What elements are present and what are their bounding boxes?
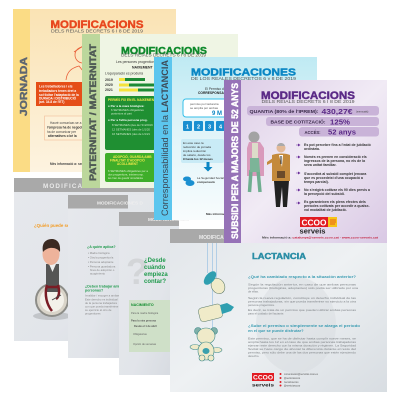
- pill: amount: (mensuals): [356, 110, 369, 114]
- panel: green leaflet on paternity and maternity: L'equiparació es produirà: [105, 72, 143, 76]
- leaflet D paragraph one: progenitoras (biológicas, adoptantes) sólo podía ser utilizado por una: [248, 286, 358, 290]
- orange leaflet side label: JORNADA: [18, 57, 30, 116]
- light green box: ADOPCIÓ, GUARDA AMB: [113, 154, 152, 159]
- green leaflet intro: Les persones progenitores: [116, 60, 158, 64]
- bullet list: temps parcial).: [304, 180, 329, 184]
- red callout: Les treballadores i els: [39, 84, 73, 88]
- dark green box: 8 SETMANES (des de l'1/4/2019: [112, 123, 153, 127]
- month number tiles: 3: [208, 124, 211, 130]
- dark green box: [105, 96, 156, 150]
- light green box: 6 SETMANES obligatòries per a: [108, 169, 148, 173]
- blue leaflet info box: implica reducción: [183, 149, 207, 153]
- stacked bars by year: 2021: [105, 88, 113, 92]
- leaflet D paragraph one: Es decir, se trata de un permiso que pueden utilizar ambas personas: [248, 308, 357, 312]
- green leaflet subtitle: DELS REIALS DECRETS 6 I 8 DE 2019: [121, 52, 207, 58]
- leaflet B heading one: ¿A quién aplica?: [87, 245, 116, 249]
- panel: grey leaflet B who does it apply to: personas?: [85, 288, 103, 292]
- leaflet B paragraph: progenitores: [85, 312, 101, 316]
- leaflet D paragraph one: personas trabajadoras, sin que pueda transferirse su ejercicio a la otra: [248, 300, 356, 304]
- leaflet B heading two: ¿Deben trabajar ambas: [85, 284, 125, 288]
- bordered note: l'empresa ha de negociar: [47, 126, 86, 130]
- leaflet B paragraph: su ejercicio al otro de: [85, 308, 112, 312]
- blue leaflet info box: reducción de jornada: [183, 145, 211, 149]
- leaflet B bullets: acogimiento: [90, 272, 106, 276]
- icon: baby bottle: [198, 303, 234, 322]
- leaflet C heading: empieza: [144, 272, 168, 278]
- leaflet D paragraph one: [248, 282, 358, 316]
- light green box: [105, 153, 155, 182]
- leaflet D paragraph two: Este permiso, que se ha de disfrutar hasta cumplir nueve meses, se: [248, 336, 356, 340]
- panel: blue leaflet on breastfeeding: compensará: [197, 180, 215, 184]
- blue leaflet info box: [181, 139, 224, 163]
- orange leaflet title: MODIFICACIONS: [50, 19, 144, 31]
- light green box: dos progenitors, ininterromp.: [108, 172, 144, 176]
- bordered note: ha de comunicar per: [47, 130, 77, 134]
- leaflet B bullets: fines de adopción o: [90, 268, 115, 272]
- leaflet D paragraph two: amplía hasta los 12 en el caso de que ambas personas trabajadoras: [248, 340, 357, 344]
- leaflet C birth table: NACIMIENTO: [131, 303, 154, 307]
- leaflet D paragraph one: persona progenitora.: [248, 303, 275, 307]
- light green box: ACOLLIMENT: [117, 162, 138, 166]
- purple leaflet title: MODIFICACIONS: [261, 90, 355, 102]
- leaflet D title: LACTANCIA: [252, 251, 306, 261]
- leaflet C birth table: Opción de semanas: [133, 342, 157, 346]
- pill: contribution base: 125%: [330, 120, 351, 126]
- green leaflet side label: PATERNITAT / MATERNITAT: [88, 44, 99, 181]
- dark green box: PERMÍS FIX EN EL NAIXEMENT: [108, 97, 156, 102]
- leaflet D paragraph two: derecho.: [248, 354, 259, 358]
- dark green box: ● Per a l'altra persona prog.: [108, 118, 148, 122]
- CCOO serveis logo: CCOO: [302, 218, 326, 228]
- leaflet D contact list: @serviciosccoo: [284, 384, 301, 388]
- panel: grey leaflet B who does it apply to: [68, 195, 143, 358]
- leaflet D contact list: [280, 373, 319, 388]
- blue leaflet footer: Más informació: [206, 212, 228, 216]
- bordered note: alternatives o bé la: [48, 134, 77, 138]
- watermark question mark: [256, 277, 336, 373]
- panel: grey leaflet C when does it start: [119, 212, 189, 375]
- leaflet D question two: en el que se puede disfrutar?: [248, 328, 304, 333]
- icon: worker outline: [66, 46, 97, 80]
- red callout: DURADA i DISTRIBUCIÓ: [39, 96, 77, 100]
- blue leaflet info box: En este caso la: [183, 141, 204, 145]
- leaflet A question: ¿Quién puede solicitarlo?: [34, 223, 88, 228]
- dark green box: 12 SETMANES (des de 1/1/20: [112, 128, 150, 132]
- leaflet D paragraph one: Según la nueva regulación, constituye un derecho individual de las: [248, 296, 357, 300]
- bullet list: ingressos de la persona, no els de la: [304, 159, 365, 163]
- leaflet D paragraph one: de ellas.: [248, 290, 259, 294]
- panel: grey leaflet D on breastfeeding: [170, 229, 387, 392]
- leaflet C heading: cuándo: [144, 265, 166, 271]
- month number tiles: 1: [186, 124, 189, 130]
- pill: access: 52 anys: [328, 130, 356, 136]
- leaflet B bullets: ▪ Persona adoptante: [88, 260, 114, 264]
- icon: pacifier: [201, 269, 228, 296]
- month number tiles: 4: [219, 124, 223, 130]
- dark green box: 16 SETMANES (des de 1/1/21: [112, 132, 150, 136]
- CCOO serveis logo: [300, 217, 337, 236]
- leaflet C heading: contar?: [144, 279, 166, 285]
- orange leaflet subtitle: DELS REIALS DECRETS 6 I 8 DE 2019: [51, 28, 143, 34]
- dark green box: ● Per a la mare biològica:: [108, 104, 144, 108]
- bullet list: S'accedirà al subsidi complet (encara: [304, 172, 366, 176]
- leaflet B bullets: ▪ Persona guardadora: [88, 264, 116, 268]
- blue leaflet side label: Corresponsabilidad en la LACTANCIA: [160, 59, 170, 216]
- leaflet C heading: ¿Desde: [144, 258, 166, 264]
- bullet list: vol modalitat de jubilació.: [304, 208, 347, 212]
- leaflet D header: MODIFICACIONES: [199, 235, 244, 241]
- panel: orange leaflet on working hours: [13, 9, 176, 172]
- leaflet C birth table: Desde el 1 de abril: [134, 324, 157, 328]
- leaflet B paragraph: Invalidar / escoger a ambas: [85, 294, 120, 298]
- leaflet D CCOO logo: CCOO: [253, 376, 273, 382]
- green leaflet title: MODIFICACIONS: [121, 45, 207, 57]
- leaflet D question one: ¿Qué ha cambiado respecto a la situación anterior?: [248, 274, 357, 279]
- blue leaflet outlined box: se amplía por ambas: [190, 106, 219, 110]
- leaflet D paragraph two: permiso, pero sólo debe una de las dos personas que estén ejerciendo: [248, 350, 356, 354]
- stacked bars by year: [105, 78, 155, 92]
- icon: hanging baby items: [190, 243, 234, 361]
- panel: blue leaflet on breastfeeding: [154, 57, 317, 220]
- leaflet C birth table: Obligatorias: [133, 332, 148, 336]
- bordered note: [44, 116, 86, 140]
- month number tiles: [183, 121, 225, 131]
- leaflet C header: MODIFICACIONES: [148, 217, 189, 222]
- illustration: elderly couple: [247, 132, 290, 207]
- light green box: FINALITAT D'ADOPCIÓ: [110, 158, 145, 162]
- panel: green leaflet on paternity and maternity: NAIXEMENT: [132, 66, 153, 70]
- leaflet C heading: [144, 258, 168, 285]
- blue leaflet outlined box: [183, 99, 239, 117]
- leaflet B bullets: ▪ Otro/a progenitor/a: [88, 256, 114, 260]
- leaflet D paragraph one: Según la regulación anterior, en caso de que ambas personas: [248, 282, 357, 286]
- pill: contribution base: [266, 117, 379, 126]
- blue leaflet subtitle: DE LOS REALES DECRETOS 6 y 8 DE 2019: [191, 76, 297, 81]
- bullet list: seva unitat familiar.: [304, 163, 337, 167]
- month number tiles: 2: [197, 124, 200, 130]
- bullet list: que es procedeixi d'una ocupació a: [304, 176, 363, 180]
- leaflet B bullets: ▪ Madre biológica: [88, 251, 110, 255]
- blue leaflet outlined box: permiso por lactancia: [190, 102, 219, 106]
- blue leaflet social security note: La Seguridad Social: [197, 176, 224, 180]
- icon: coins: [183, 176, 194, 186]
- leaflet D paragraph two: ejerzan este derecho con la misma duración y régimen. La Seguridad: [248, 344, 356, 348]
- elderly man: [267, 143, 290, 207]
- purple leaflet footer: Més informació a: catalunya@serveis.ccoo.cat · www.ccoo-serveis.cat: [262, 236, 378, 240]
- pill: amount: [247, 106, 379, 116]
- bordered note: Hauré comunicar-se a: [50, 121, 82, 125]
- icon: teddy bear: [190, 328, 222, 361]
- blue leaflet info box: de salario, desde los: [183, 153, 211, 157]
- leaflet D question two: ¿Sube el permiso o simplemente se alarga el período: [248, 323, 361, 328]
- red callout: [36, 82, 86, 106]
- panel: purple leaflet on subsidy for over 52s: [224, 80, 387, 243]
- purple leaflet side label: SUBSIDI PER A MAJORS DE 52 ANYS: [230, 83, 241, 239]
- leaflet B header: MODIFICACIONES D: [97, 200, 143, 206]
- leaflet D question two: [248, 323, 361, 333]
- leaflet B paragraph: de la persona trabajadora: [85, 301, 117, 305]
- dark green box: 6 SETMANES obligatòries: [111, 108, 144, 112]
- elderly woman: [247, 132, 264, 192]
- pill: access: [299, 127, 379, 136]
- dark green box: posteriors al part: [111, 112, 132, 116]
- panel: blue leaflet on breastfeeding: CORRESPONSABILIDAD: [198, 91, 238, 95]
- leaflet B paragraph: Este derecho es individual: [85, 298, 118, 302]
- leaflet A clock figure: [33, 239, 71, 320]
- leaflet C birth table: Para la madre biológica: [131, 311, 159, 315]
- blue leaflet outlined box: 9 M: [212, 111, 222, 117]
- leaflet D contact list: @serviciosccoo: [284, 377, 301, 380]
- bullet list: [296, 143, 371, 212]
- red callout: sol·licitar l'adaptació de la: [39, 93, 79, 97]
- pill: amount: QUANTIA (80% de l'IPREM):: [250, 109, 318, 114]
- leaflet B bullets: [88, 251, 116, 276]
- icon: down arrow: [204, 162, 212, 172]
- bullet list: No s'exigirà cotitzar els 90 dies previs a: [304, 188, 370, 192]
- blue leaflet info box: 9 hasta los 12 meses: [183, 157, 213, 161]
- leaflet C birth table: [129, 300, 179, 352]
- stacked bars by year: 2019: [105, 78, 113, 82]
- bullet list: Es garanteixen els plens efectes dels: [304, 200, 366, 204]
- pill: amount: 430,27€: [322, 109, 353, 116]
- panel: green leaflet on paternity and maternity: [82, 34, 238, 188]
- leaflet D paragraph one: para el cuidado del lactante.: [248, 312, 284, 316]
- leaflet D CCOO logo: serveis: [252, 382, 274, 388]
- leaflet D paragraph two: Social se hace cargo de abonar la diferencia durante el resto del: [248, 347, 356, 351]
- leaflet D CCOO logo: [252, 373, 274, 388]
- leaflet B paragraph: [85, 294, 120, 316]
- panel: grey leaflet A who can use it: [14, 178, 174, 341]
- leaflet D paragraph two: [248, 336, 357, 358]
- light green box: les han de gaudir simultània: [108, 176, 143, 180]
- blue leaflet intro: El Permiso de: [205, 87, 226, 91]
- leaflet B paragraph: con que pueda transferirse: [85, 304, 119, 308]
- pill: access: ACCÉS:: [304, 130, 321, 135]
- red callout: treballadors tenen dret a: [39, 89, 76, 93]
- orange leaflet footer: Més informació a: serveis: [50, 162, 89, 166]
- bullet list: la percepció del subsidi.: [304, 192, 345, 196]
- bullet list: Només es prenen en consideració els: [304, 155, 367, 159]
- purple leaflet subtitle: DELS REIALS DECRETS 6 I 8 DE 2019: [262, 99, 355, 104]
- leaflet C question mark: ?: [126, 251, 148, 292]
- leaflet D contact list: comunicacion@servicios.ccoo.es: [284, 373, 319, 376]
- bullet list: períodes cotitzats per accedir a qualse-: [304, 204, 370, 208]
- bullet list: ordinària.: [304, 147, 320, 151]
- CCOO serveis logo: serveis: [300, 228, 326, 236]
- leaflet C birth table: Para la otra persona: [131, 318, 156, 322]
- bullet list: Es pot percebre fins a l'edat de jubilació: [304, 143, 371, 147]
- red callout: (art. 34.8 de l'ET): [39, 100, 64, 104]
- leaflet A header: MODIFICACIONES: [43, 183, 113, 190]
- pill: contribution base: BASE DE COTITZACIÓ:: [270, 120, 326, 124]
- leaflet D contact list: /serviciosccoo: [284, 381, 299, 384]
- stacked bars by year: 2020: [105, 83, 113, 87]
- blue leaflet title: MODIFICACIONES: [191, 66, 296, 78]
